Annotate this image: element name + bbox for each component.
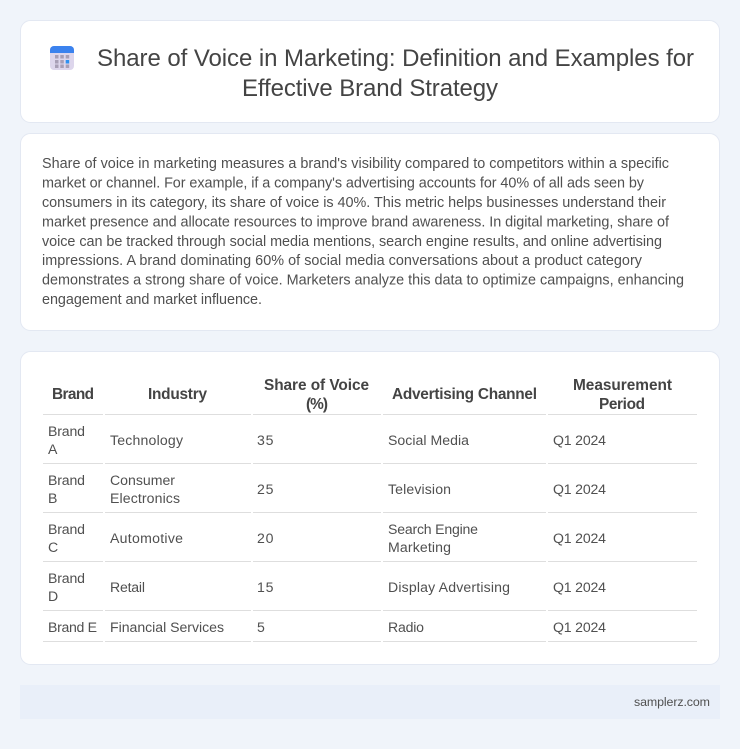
table row: Brand A: Social Media (388, 432, 469, 448)
title (97, 45, 694, 102)
table header row (52, 377, 672, 413)
table row: Brand A: Brand (48, 423, 85, 439)
table row: Brand E: 5 (257, 619, 265, 635)
table row: Brand D: 15 (257, 579, 274, 595)
text block: share of voice definition: market or channel. For example, if a company's advertising accounts for 40% of all ads seen by (42, 175, 645, 191)
text block: share of voice definition: engagement and market influence. (42, 292, 262, 308)
icon: calendar (50, 46, 74, 70)
table row: Brand C: 20 (257, 530, 274, 546)
table row: Brand A: Q1 2024 (553, 432, 606, 448)
table row: Brand B: Q1 2024 (553, 481, 606, 497)
text block: share of voice definition: demonstrates a strong share of voice. Marketers analyze this data to optimize campaigns, enhancing (42, 273, 684, 289)
panel: data table (20, 352, 720, 664)
table header row: Advertising Channel (392, 386, 537, 403)
table row: Brand C (48, 521, 606, 555)
table row: Brand C: Q1 2024 (553, 530, 606, 546)
table row: Brand C: Marketing (388, 539, 451, 555)
table row: Brand A: 35 (257, 432, 274, 448)
table row: Brand E: Radio (388, 619, 424, 635)
text block: share of voice definition (42, 156, 684, 308)
table header row: Industry (148, 386, 207, 403)
table row: Brand B: Television (388, 481, 451, 497)
text block: share of voice definition: voice can be tracked through social media mentions, search engine results, and online advertising (42, 234, 662, 250)
table row: Brand B (48, 472, 606, 506)
table row: Brand E: Financial Services (110, 619, 224, 635)
panel: description (20, 134, 720, 330)
table row: Brand B: Brand (48, 472, 85, 488)
table header row: Brand (52, 386, 94, 403)
table row: Brand D: Display Advertising (388, 579, 510, 595)
table row: Brand E (48, 619, 606, 635)
title: Effective Brand Strategy (242, 75, 498, 102)
table row: Brand D: Brand (48, 570, 85, 586)
text block: share of voice definition: Share of voice in marketing measures a brand's visibility compared to competitors within a specific (42, 156, 669, 172)
table row: Brand A: A (48, 441, 58, 457)
table row: Brand B: B (48, 490, 57, 506)
footer (20, 685, 720, 719)
table row: Brand E: Q1 2024 (553, 619, 606, 635)
title: Share of Voice in Marketing: Definition and Examples for (97, 45, 694, 72)
table row: Brand B: Consumer (110, 472, 175, 488)
table row: Brand D: Retail (110, 579, 145, 595)
table header row: Share of Voice (264, 377, 369, 394)
table row: Brand C: Search Engine (388, 521, 478, 537)
table header row: (%) (306, 396, 328, 413)
footer: samplerz.com (634, 695, 710, 709)
panel: title card (20, 20, 720, 122)
table header row: Measurement (573, 377, 672, 394)
table row: Brand C: C (48, 539, 58, 555)
table row: Brand A (48, 423, 606, 457)
text block: share of voice definition: market presence and allocate resources to improve brand awareness. In digital marketing, share of (42, 214, 670, 230)
table row: Brand C: Brand (48, 521, 85, 537)
table row: Brand D (48, 570, 606, 604)
text block: share of voice definition: impressions. A brand dominating 60% of social media conversations about a product category (42, 253, 643, 269)
table row: Brand C: Automotive (110, 530, 183, 546)
table row: Brand D: Q1 2024 (553, 579, 606, 595)
text block: share of voice definition: consumers in its category, its share of voice is 40%. This metric helps businesses understand their (42, 195, 666, 211)
table row: Brand B: Electronics (110, 490, 180, 506)
table row: Brand D: D (48, 588, 58, 604)
table row: Brand A: Technology (110, 432, 184, 448)
table header row: Period (599, 396, 645, 413)
table row: Brand E: Brand E (48, 619, 97, 635)
table row: Brand B: 25 (257, 481, 274, 497)
